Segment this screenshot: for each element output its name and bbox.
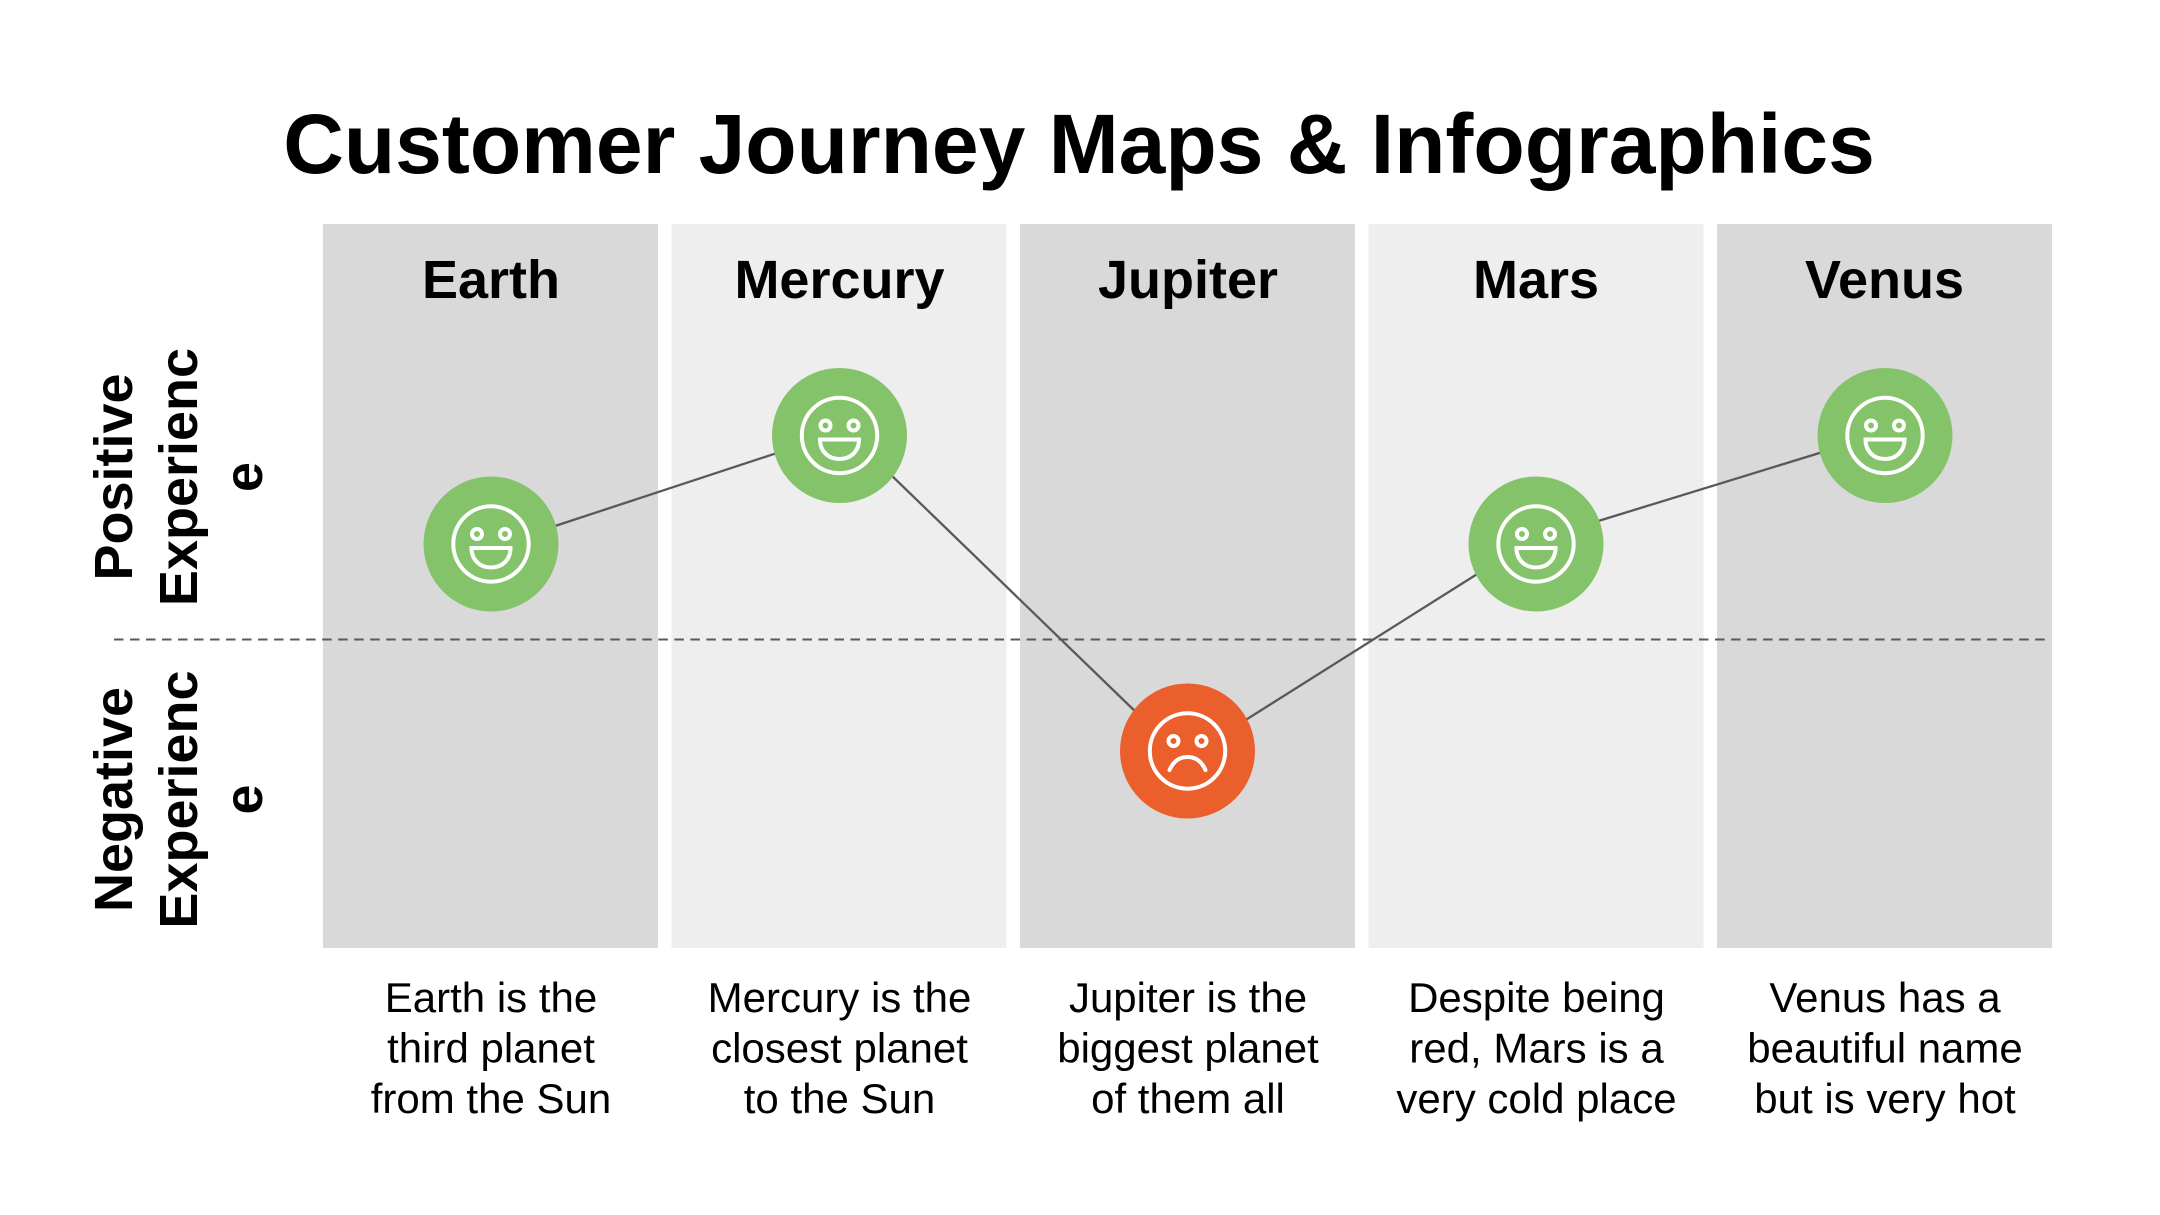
label: negative experience: Negative — [84, 687, 144, 912]
description: Mars: red, Mars is a — [1409, 1024, 1664, 1072]
icon: Earth happy face — [424, 476, 558, 612]
description: Mercury: Mercury is the — [708, 974, 971, 1021]
icon: Mercury happy face — [772, 368, 907, 503]
description: Mars: Despite being — [1408, 974, 1665, 1021]
label: negative experience — [84, 670, 274, 929]
description: Earth: from the Sun — [371, 1075, 611, 1122]
description: Venus: but is very hot — [1754, 1075, 2016, 1122]
label: positive experience — [84, 348, 274, 606]
heading: Jupiter: Jupiter — [1098, 250, 1278, 310]
panel: Jupiter — [1020, 224, 1355, 948]
description: Venus: beautiful name — [1747, 1024, 2023, 1072]
icon: Jupiter sad face — [1120, 684, 1255, 818]
label: positive experience: Experienc — [149, 348, 209, 606]
description: Jupiter: Jupiter is the — [1069, 974, 1307, 1021]
description: Venus: Venus has a — [1769, 974, 2001, 1021]
label: positive experience: Positive — [84, 373, 144, 581]
journey line — [552, 451, 1826, 721]
panel: Mars — [1368, 224, 1704, 948]
icon: Venus happy face — [1818, 368, 1952, 503]
description: Jupiter: biggest planet — [1057, 1024, 1319, 1072]
panel: Earth — [323, 224, 658, 948]
description: Earth: Earth is the — [385, 974, 597, 1021]
description: Mars — [1396, 974, 1677, 1122]
description: Mercury — [708, 974, 971, 1122]
description: Jupiter — [1057, 974, 1319, 1122]
description: Venus — [1747, 974, 2023, 1122]
neutral dashed divider — [114, 638, 2046, 640]
description: Earth: third planet — [387, 1024, 595, 1072]
description: Mars: very cold place — [1396, 1075, 1677, 1122]
panel: Venus — [1717, 224, 2052, 948]
heading: Earth: Earth — [422, 250, 560, 310]
label: negative experience: e — [214, 784, 274, 815]
label: negative experience: Experienc — [149, 670, 209, 929]
description: Mercury: closest planet — [711, 1024, 968, 1072]
description: Mercury: to the Sun — [744, 1075, 935, 1122]
heading: Mars: Mars — [1473, 250, 1599, 310]
heading: Venus: Venus — [1805, 250, 1964, 310]
icon: Mars happy face — [1468, 476, 1604, 612]
panel: Mercury — [672, 224, 1006, 948]
description: Earth — [371, 974, 611, 1122]
description: Jupiter: of them all — [1091, 1075, 1285, 1122]
title: Customer Journey Maps & Infographics — [283, 97, 1875, 191]
label: positive experience: e — [214, 462, 274, 492]
heading: Mercury: Mercury — [734, 250, 945, 310]
